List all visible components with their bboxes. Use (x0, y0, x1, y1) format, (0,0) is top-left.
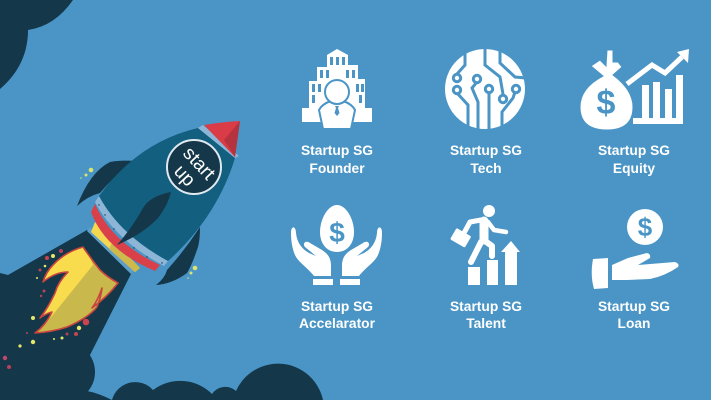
label: Startup SG Accelarator: Startup SG (301, 299, 373, 314)
label: Startup SG Equity: Startup SG (598, 143, 670, 158)
porthole badge: up (169, 161, 199, 191)
label: Startup SG Tech: Tech (470, 161, 502, 176)
rocket nose cone (198, 121, 240, 158)
icon: equity money bag and growth chart (580, 49, 689, 130)
exhaust smoke trail (0, 230, 133, 400)
icon: founder building and person (302, 49, 372, 129)
icon: equity money bag and growth chart: $ (597, 84, 616, 122)
rocket (77, 121, 240, 285)
label: Startup SG Loan: Loan (618, 316, 650, 331)
icon: accelerator hands and egg: $ (329, 217, 345, 248)
label: Startup SG Accelarator (299, 299, 376, 331)
rocket body (99, 128, 235, 261)
label: Startup SG Equity (598, 143, 670, 176)
porthole badge: start (178, 143, 219, 185)
label: Startup SG Accelarator: Accelarator (299, 316, 376, 331)
label: Startup SG Founder: Startup SG (301, 143, 373, 158)
cloud: top left (0, 0, 73, 89)
rocket fins (77, 161, 200, 285)
label: Startup SG Tech: Startup SG (450, 143, 522, 158)
label: Startup SG Founder: Founder (309, 161, 365, 176)
rocket nozzle bands (87, 196, 168, 274)
label: Startup SG Equity: Equity (613, 161, 655, 176)
label: Startup SG Loan (598, 299, 670, 331)
cloud: bottom (112, 364, 323, 400)
label: Startup SG Tech (450, 143, 522, 176)
icon: tech circuit (445, 48, 526, 130)
icon: talent climbing steps (450, 205, 520, 285)
label: Startup SG Loan: Startup SG (598, 299, 670, 314)
icon: loan hand and coin (592, 209, 679, 289)
sparks (3, 168, 197, 369)
porthole badge (167, 140, 221, 194)
rocket flame (34, 246, 119, 334)
icon: accelerator hands and egg (291, 205, 382, 285)
label: Startup SG Talent (450, 299, 522, 331)
label: Startup SG Talent: Talent (466, 316, 506, 331)
centre fin (117, 192, 171, 245)
icon: loan hand and coin: $ (638, 212, 653, 242)
label: Startup SG Founder (301, 143, 373, 176)
label: Startup SG Talent: Startup SG (450, 299, 522, 314)
